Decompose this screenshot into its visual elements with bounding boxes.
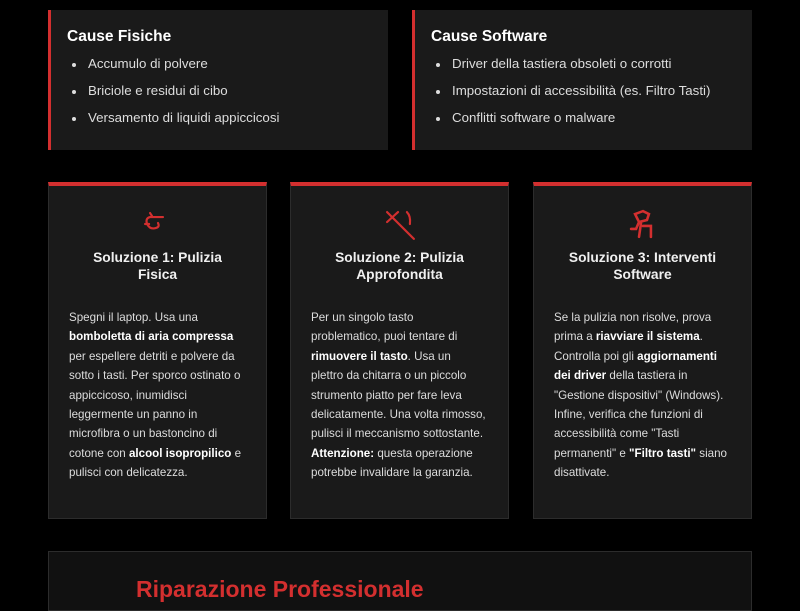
heading: soluzione 1 xyxy=(93,250,222,282)
heading: soluzione 2: Soluzione 2: Pulizia xyxy=(335,250,464,265)
heading: soluzione 2: Approfondita xyxy=(356,267,443,282)
list: software causes: Impostazioni di accessibilità (es. Filtro Tasti) xyxy=(452,83,710,98)
heading: soluzione 1: Fisica xyxy=(138,267,177,282)
list: software causes: Driver della tastiera obsoleti o corrotti xyxy=(452,56,672,71)
icon: software person xyxy=(630,210,652,238)
panel: cause software xyxy=(412,10,752,150)
text: soluzione 3: Se la pulizia non risolve, prova prima a riavviare il sistema. Controlla poi gli aggiornamenti dei driver della tastiera in "Gestione dispositivi" (Windows). Infine, verifica che funzioni di accessibilità come "Tasti permanenti" e "Filtro tasti" siano disattivate. xyxy=(554,311,727,479)
icon: tool xyxy=(386,210,415,240)
text: soluzione 1: Spegni il laptop. Usa una bomboletta di aria compressa per espellere detriti e polvere da sotto i tasti. Per sporco ostinato o appiccicoso, inumidisci leggermente un panno in microfibra o un bastoncino di cotone con alcool isopropilico e pulisci con delicatezza. xyxy=(69,311,241,479)
list: software causes: Conflitti software o malware xyxy=(452,110,615,125)
heading: soluzione 3: Software xyxy=(613,267,672,282)
card: soluzione 3 xyxy=(533,182,752,519)
heading: riparazione professionale: Riparazione Professionale xyxy=(136,576,424,602)
card: soluzione 2 xyxy=(290,182,509,519)
panel: riparazione professionale xyxy=(48,551,752,611)
heading: soluzione 1: Soluzione 1: Pulizia xyxy=(93,250,222,265)
list: physical causes: Briciole e residui di cibo xyxy=(88,83,228,98)
heading: cause fisiche: Cause Fisiche xyxy=(67,28,171,45)
icon: cleaning xyxy=(144,212,164,230)
heading: soluzione 2 xyxy=(335,250,464,282)
list: physical causes xyxy=(72,56,279,125)
text: soluzione 2: Per un singolo tasto problematico, puoi tentare di rimuovere il tasto. Usa un plettro da chitarra o un piccolo strumento piatto per fare leva delicatamente. Una volta rimosso, pulisci il meccanismo sottostante. Attenzione: questa operazione potrebbe invalidare la garanzia. xyxy=(311,311,486,479)
heading: soluzione 3: Soluzione 3: Interventi xyxy=(569,250,716,265)
heading: cause software: Cause Software xyxy=(431,28,547,45)
heading: soluzione 3 xyxy=(569,250,716,282)
panel: cause fisiche xyxy=(48,10,388,150)
list: physical causes: Accumulo di polvere xyxy=(88,56,208,71)
card: soluzione 1 xyxy=(48,182,267,519)
list: software causes xyxy=(436,56,710,125)
list: physical causes: Versamento di liquidi appiccicosi xyxy=(88,110,279,125)
